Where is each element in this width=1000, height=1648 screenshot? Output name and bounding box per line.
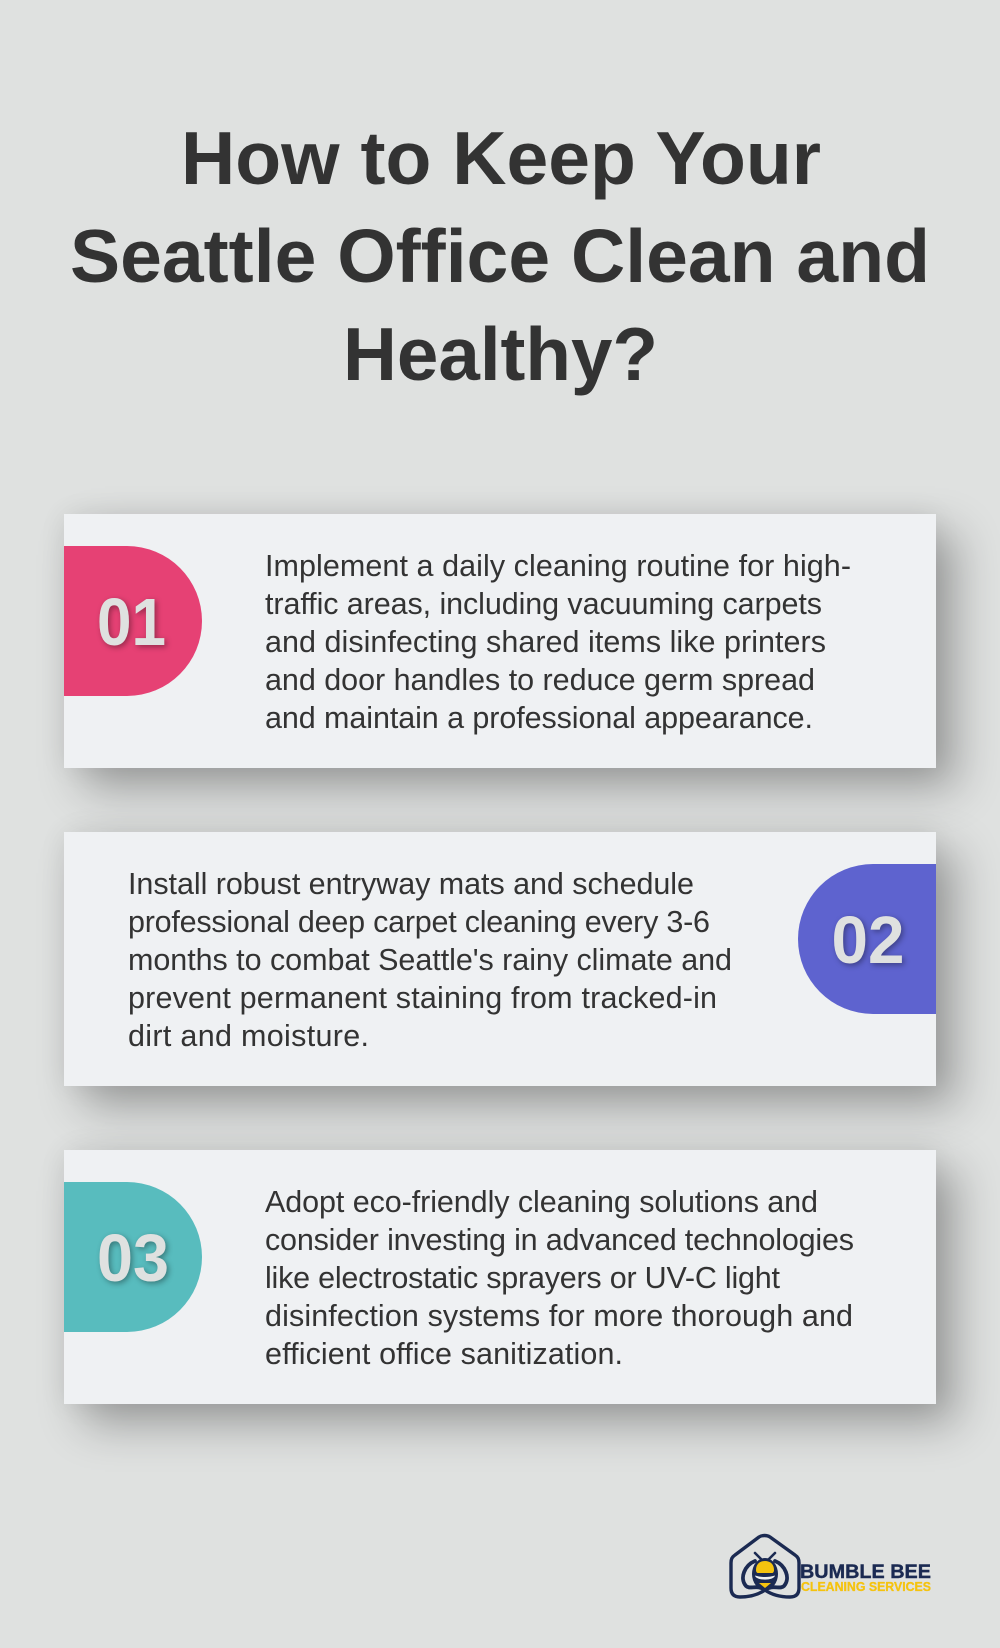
badge: 01: 01 bbox=[97, 585, 166, 660]
panel: step 2 bbox=[64, 832, 936, 1086]
text: step 3 description: disinfection systems for more thorough and bbox=[265, 1299, 853, 1333]
logo text: company name: BUMBLE BEE bbox=[800, 1562, 931, 1583]
icon: house with bee bbox=[731, 1536, 799, 1597]
text: step 2 description: prevent permanent staining from tracked-in bbox=[128, 981, 717, 1015]
text: step 1 description: traffic areas, including vacuuming carpets bbox=[265, 587, 822, 621]
text: step 2 description: professional deep carpet cleaning every 3-6 bbox=[128, 905, 710, 939]
badge: 02: 02 bbox=[832, 903, 904, 978]
title: Healthy? bbox=[343, 312, 658, 396]
panel: step 1 bbox=[64, 514, 936, 768]
badge: 02 bbox=[798, 864, 936, 1014]
text: step 3 description: Adopt eco-friendly cleaning solutions and bbox=[265, 1185, 818, 1219]
text: step 1 description: Implement a daily cleaning routine for high- bbox=[265, 549, 851, 583]
title: Seattle Office Clean and bbox=[70, 214, 930, 298]
badge: 03: 03 bbox=[97, 1221, 169, 1296]
title: How to Keep Your bbox=[181, 116, 821, 200]
text: step 1 description: and door handles to reduce germ spread bbox=[265, 663, 815, 697]
text: step 3 description: like electrostatic sprayers or UV-C light bbox=[265, 1261, 781, 1295]
logo text: tagline: CLEANING SERVICES bbox=[801, 1580, 931, 1594]
text: step 2 description: months to combat Seattle's rainy climate and bbox=[128, 943, 732, 977]
text: step 3 description: consider investing in advanced technologies bbox=[265, 1223, 854, 1257]
text: step 2 description: dirt and moisture. bbox=[128, 1019, 369, 1053]
text: step 3 description: efficient office sanitization. bbox=[265, 1337, 623, 1371]
text: step 1 description: and disinfecting shared items like printers bbox=[265, 625, 826, 659]
text: step 2 description: Install robust entryway mats and schedule bbox=[128, 867, 694, 901]
badge: 03 bbox=[64, 1182, 202, 1332]
text: step 1 description: and maintain a professional appearance. bbox=[265, 701, 813, 735]
title bbox=[70, 116, 930, 396]
panel: step 3 bbox=[64, 1150, 936, 1404]
badge: 01 bbox=[64, 546, 202, 696]
